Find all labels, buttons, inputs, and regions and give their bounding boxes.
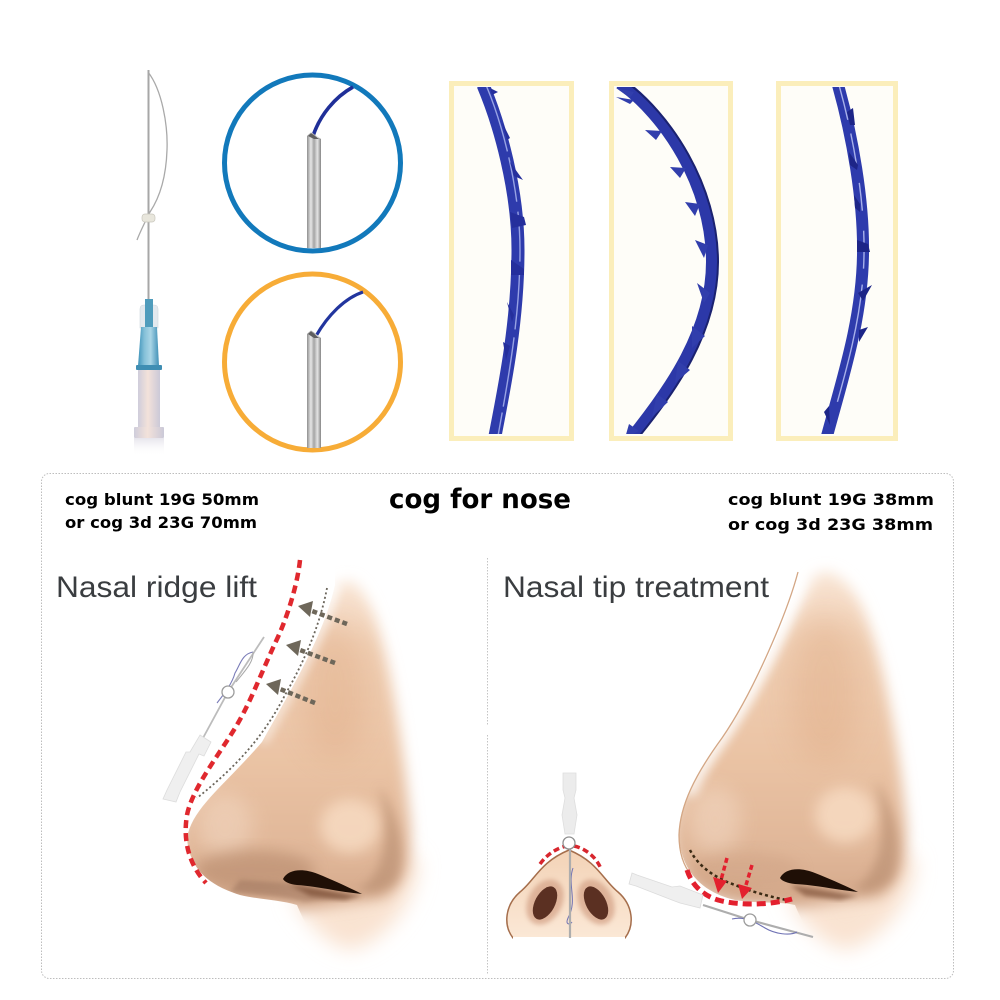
panel: thread detail 1 [452, 84, 572, 438]
spec text left [65, 490, 259, 532]
spec text right: cog blunt 19G 38mm [728, 490, 934, 509]
illustration: nose side view, tip treatment [672, 572, 915, 950]
spec text right [728, 490, 934, 534]
needle: tip treatment [629, 873, 813, 937]
illustration: nose front view [507, 773, 631, 938]
illustration: nose side view, ridge lift [178, 581, 418, 950]
profile line [679, 572, 798, 876]
nostril [780, 869, 858, 900]
spec text left: or cog 3d 23G 70mm [65, 513, 257, 532]
needle: ridge lift [163, 637, 264, 802]
spec text right: or cog 3d 23G 38mm [728, 515, 933, 534]
nose marks: tip treatment dashed lines and arrows [687, 850, 792, 904]
magnified circle: orange, blunt cannula [224, 274, 400, 450]
nostril [283, 870, 362, 900]
panel: cog for nose [42, 474, 954, 978]
nose marks: ridge lift dashed lines and arrows [186, 560, 347, 883]
panel: thread detail 3 [778, 84, 896, 438]
syringe needle with thread [134, 70, 167, 456]
title: nasal ridge lift: Nasal ridge lift [56, 571, 258, 604]
heading: cog for nose [389, 484, 571, 515]
nostril left [519, 873, 571, 931]
nostril right [570, 873, 622, 931]
title: nasal tip treatment: Nasal tip treatment [503, 571, 770, 604]
spec text left: cog blunt 19G 50mm [65, 490, 259, 509]
panel: thread detail 2 [612, 81, 730, 439]
magnified circle: blue, blunt cannula [224, 75, 400, 251]
